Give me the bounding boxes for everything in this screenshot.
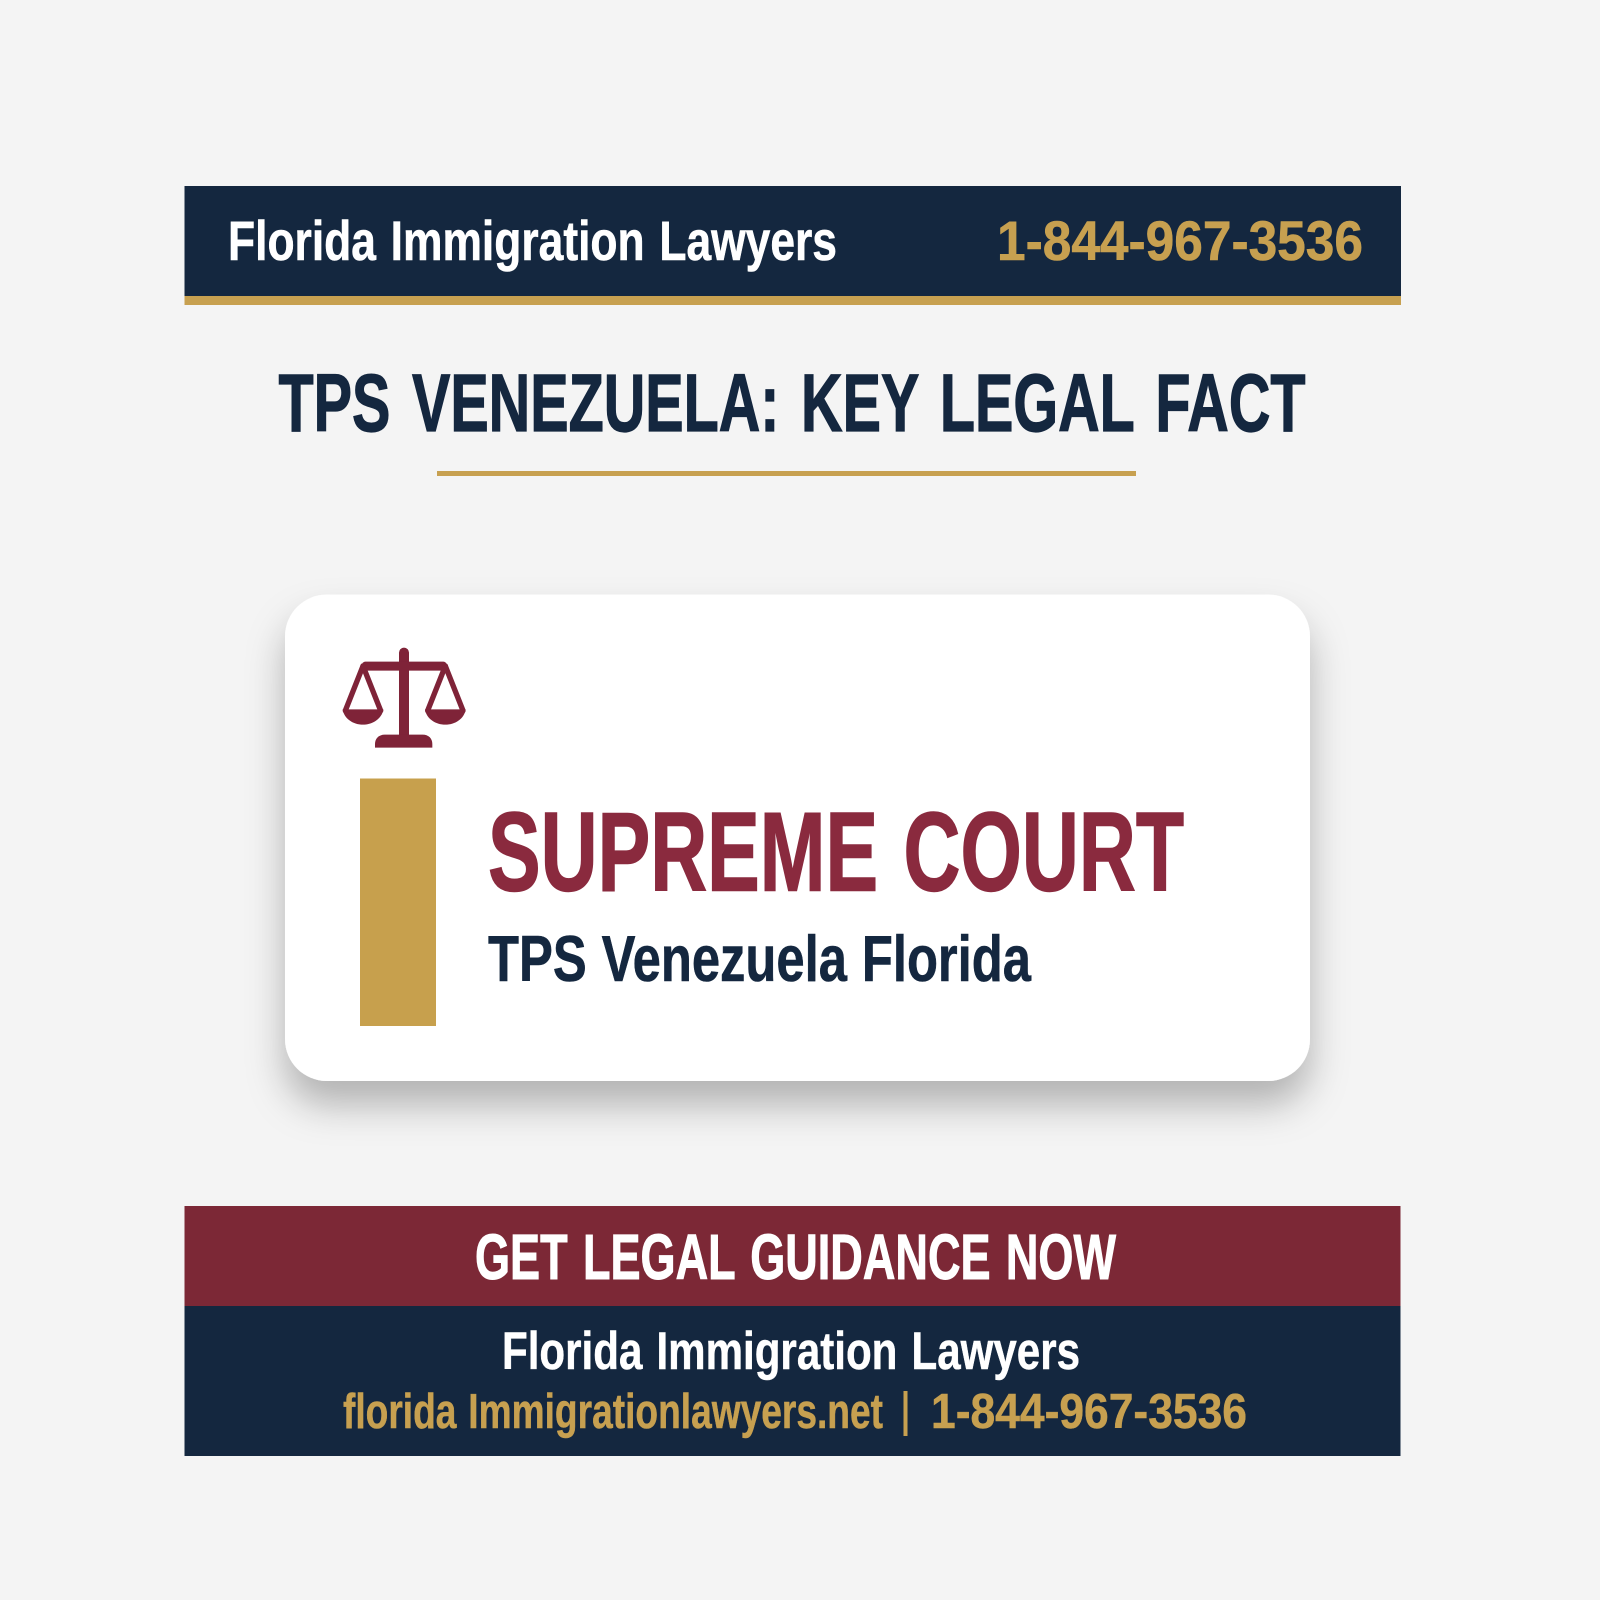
footer separator bbox=[904, 1391, 908, 1436]
icon: scales of justice bbox=[343, 648, 466, 748]
footer website: florida Immigrationlawyers.net bbox=[343, 1385, 883, 1439]
footer firm name: Florida Immigration Lawyers bbox=[502, 1322, 1080, 1381]
card background bbox=[285, 594, 1310, 1081]
gold accent bar bbox=[360, 778, 436, 1026]
header gold rule bbox=[184, 296, 1401, 305]
footer navy band bbox=[184, 1306, 1400, 1456]
CTA heading: GET LEGAL GUIDANCE NOW bbox=[475, 1221, 1116, 1293]
CTA red band bbox=[184, 1206, 1400, 1306]
footer phone number: 1-844-967-3536 bbox=[931, 1385, 1247, 1439]
footer call to action bbox=[184, 1206, 1400, 1456]
card subheading: TPS Venezuela Florida bbox=[488, 922, 1032, 995]
panel: key fact card bbox=[285, 594, 1310, 1081]
header banner bbox=[184, 186, 1401, 305]
title underline bbox=[437, 471, 1136, 476]
header firm name: Florida Immigration Lawyers bbox=[228, 209, 837, 272]
header bar background bbox=[184, 186, 1401, 296]
header phone number: 1-844-967-3536 bbox=[997, 209, 1363, 272]
card headline: SUPREME COURT bbox=[488, 790, 1184, 914]
